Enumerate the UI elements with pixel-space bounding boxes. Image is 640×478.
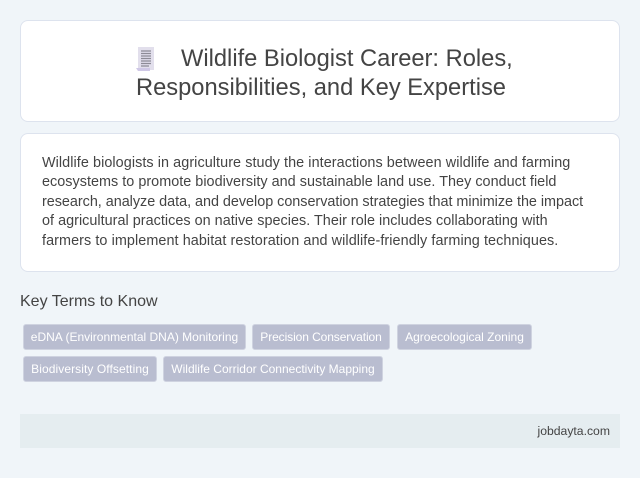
- tag: biodiversity offsetting: [23, 356, 157, 382]
- tag: wildlife corridor: [163, 356, 383, 382]
- tag: biodiversity offsetting: Biodiversity Offsetting: [31, 362, 149, 376]
- heading: key terms: Key Terms to Know: [20, 293, 158, 310]
- description text: farmers to implement habitat restoration and wildlife-friendly farming techniques.: [42, 233, 558, 249]
- tag: eDNA: [23, 324, 246, 350]
- title line 1: Wildlife Biologist Career: Roles,: [181, 46, 513, 72]
- title line 2: Responsibilities, and Key Expertise: [136, 75, 506, 101]
- description text: Wildlife biologists in agriculture study the interactions between wildlife and farming: [42, 155, 570, 171]
- tag: eDNA: eDNA (Environmental DNA) Monitoring: [31, 330, 238, 344]
- panel: title card: [20, 20, 620, 122]
- tag: agroecological zoning: Agroecological Zoning: [405, 330, 524, 344]
- panel: key term tags: [23, 324, 532, 382]
- description text: research, analyze data, and develop conservation strategies that minimize the impact: [42, 194, 583, 210]
- tag: precision conservation: Precision Conservation: [260, 330, 382, 344]
- footer bar: [20, 414, 620, 448]
- description text: [42, 155, 584, 249]
- footer source: jobdayta.com: [538, 424, 610, 438]
- panel: description card: [20, 133, 620, 272]
- tag: agroecological zoning: [397, 324, 532, 350]
- icon: document scroll: [136, 47, 154, 71]
- tag: wildlife corridor: Wildlife Corridor Connectivity Mapping: [171, 362, 375, 376]
- description text: of agricultural practices on native species. Their role includes collaborating with: [42, 213, 548, 229]
- description text: ecosystems to promote biodiversity and sustainable land use. They conduct field: [42, 174, 556, 190]
- tag: precision conservation: [252, 324, 390, 350]
